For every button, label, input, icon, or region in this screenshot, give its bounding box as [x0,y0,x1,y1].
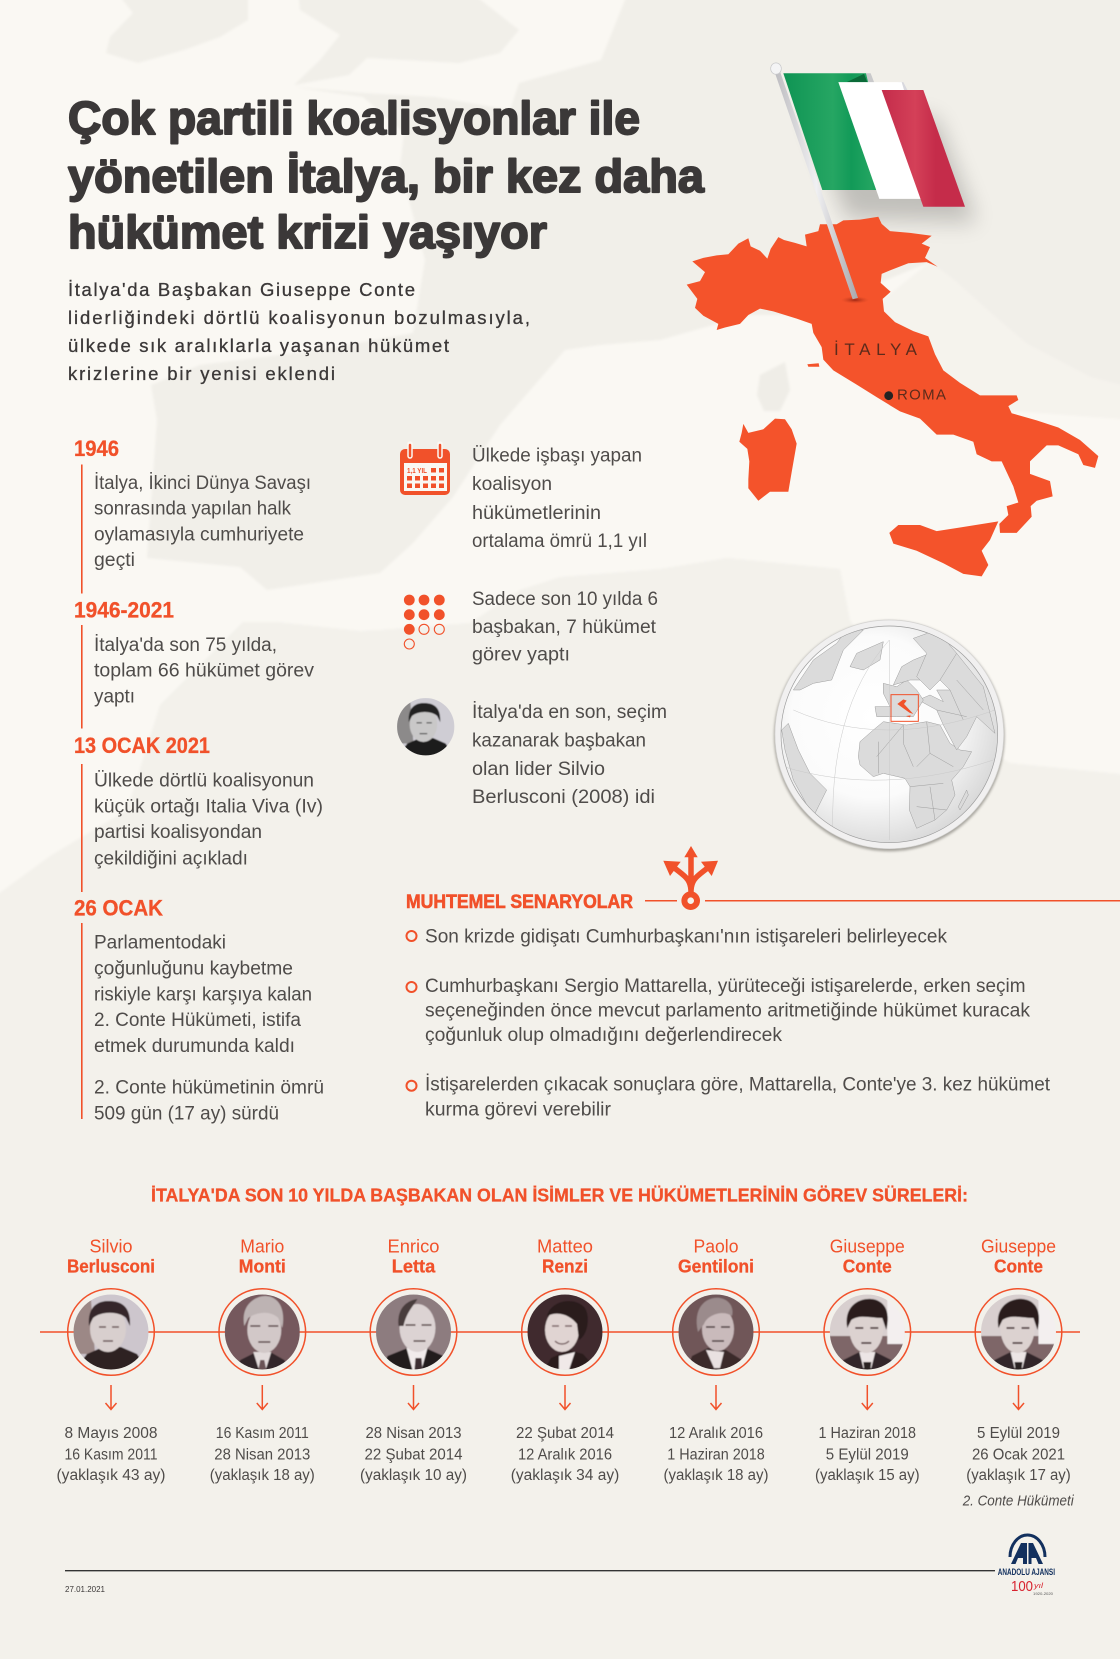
prime minister: Renzi: Matteo [537,1236,593,1256]
Sicily [889,521,998,576]
title: hükümet krizi yaşıyor [68,206,547,258]
fact: prime ministers: başbakan, 7 hükümet [472,617,657,638]
timeline: 13 Ocak 2021: 13 OCAK 2021 [74,733,210,758]
Sardinia [739,419,797,501]
timeline: 13 Ocak 2021 [74,733,323,892]
prime minister: Conte (second government): (yaklaşık 17 ay) [966,1467,1071,1484]
prime minister: Letta [360,1236,467,1484]
timeline: 26 Ocak: riskiyle karşı karşıya kalan [94,984,312,1005]
logo: Anadolu Ajansı: ANADOLU AJANSI [998,1567,1055,1578]
timeline: 1946-2021 [74,598,315,728]
scenario 2: çoğunluk olup olmadığını değerlendirecek [425,1025,783,1046]
fact: Berlusconi [472,702,667,808]
timeline: 1946-2021: 1946-2021 [74,598,174,622]
timeline: 26 Ocak: çoğunluğunu kaybetme [94,959,293,980]
label: ITALYA: İTALYA [834,340,918,359]
fact: prime ministers: görev yaptı [472,645,570,666]
prime minister: Gentiloni [664,1236,768,1484]
scenario 3 [406,1075,1051,1120]
fact: coalition lifetime: ortalama ömrü 1,1 yıl [472,531,647,552]
scenario 2: seçeneğinden önce mevcut parlamento aritmetiğinde hükümet kuracak [425,1001,1031,1022]
prime minister: Gentiloni: 12 Aralık 2016 [669,1425,763,1442]
pole shadow [841,296,869,304]
prime minister: Renzi: 22 Şubat 2014 [516,1425,614,1442]
timeline: 1946-2021: toplam 66 hükümet görev [94,661,315,682]
prime minister: Berlusconi: Silvio [90,1236,132,1256]
prime minister: Berlusconi [56,1236,166,1484]
subtitle [68,279,530,384]
timeline: 26 Ocak: Parlamentodaki [94,932,226,954]
timeline: 26 Ocak: 2. Conte Hükümeti, istifa [94,1010,301,1031]
fact: Berlusconi: kazanarak başbakan [472,731,646,752]
prime minister: Conte (first government): Giuseppe [830,1236,905,1256]
fact: coalition lifetime: Ülkede işbaşı yapan [472,446,642,467]
title: yönetilen İtalya, bir kez daha [68,150,704,202]
scenario 1: Son krizde gidişatı Cumhurbaşkanı'nın istişareleri belirleyecek [425,926,947,947]
title: Çok partili koalisyonlar ile [68,92,640,144]
prime minister: Gentiloni: (yaklaşık 18 ay) [664,1467,768,1484]
prime minister: Monti: Monti [239,1256,286,1276]
prime minister: Conte (second government) [966,1236,1071,1484]
prime minister: Conte (first government): 1 Haziran 2018 [819,1425,916,1442]
note: second Conte government: 2. Conte Hükümeti [962,1494,1074,1510]
prime minister: Monti: Mario [240,1236,284,1256]
scenario rule line [645,900,1120,902]
scenario 2 [406,976,1031,1046]
flag shadow [807,111,977,222]
prime minister: Renzi [511,1236,619,1484]
prime minister: Conte (second government): Giuseppe [981,1236,1056,1256]
timeline: 26 Ocak: etmek durumunda kaldı [94,1036,295,1057]
heading: Muhtemel Senaryolar: MUHTEMEL SENARYOLAR [406,892,633,913]
scenario 3: İstişarelerden çıkacak sonuçlara göre, Mattarella, Conte'ye 3. kez hükümet [425,1075,1051,1096]
prime minister: Gentiloni: Gentiloni [678,1256,754,1276]
timeline: 1946: 1946 [74,436,119,461]
icon: diverging arrows [663,846,718,907]
icon: calendar: 1,1 YIL [407,468,428,475]
timeline: 26 Ocak: 2. Conte hükümetinin ömrü [94,1078,324,1098]
fact: Berlusconi: Berlusconi (2008) idi [472,787,655,808]
timeline: 13 Ocak 2021: Ülkede dörtlü koalisyonun [94,770,314,791]
prime minister: Conte (first government): Conte [843,1256,892,1276]
prime minister: Conte (second government): 5 Eylül 2019 [977,1425,1060,1442]
Italy mainland [687,217,1098,533]
timeline: 26 Ocak: 26 OCAK [74,895,163,920]
prime minister: Letta: Letta [392,1256,436,1276]
prime minister: Gentiloni: 1 Haziran 2018 [667,1446,765,1463]
prime minister: Conte (first government) [815,1236,920,1484]
map of Italy with flag [687,63,1098,576]
flag pole [775,71,858,299]
timeline: 1946: geçti [94,550,135,571]
prime minister: Berlusconi: Berlusconi [67,1256,155,1276]
date: 27.01.2021 [65,1584,105,1594]
timeline: 26 Ocak [74,895,324,1124]
Elba [807,363,819,367]
prime minister: Letta: 22 Şubat 2014 [364,1446,463,1463]
timeline: 1946: sonrasında yapılan halk [94,499,291,520]
timeline: 1946: oylamasıyla cumhuriyete [94,524,304,546]
pole knob [771,63,781,74]
heading: prime ministers: İTALYA'DA SON 10 YILDA BAŞBAKAN OLAN İSİMLER VE HÜKÜMETLERİNİN GÖREV SÜRELERİ: [151,1186,968,1206]
prime minister: Renzi: 12 Aralık 2016 [518,1446,612,1463]
prime minister: Berlusconi: 16 Kasım 2011 [64,1446,158,1463]
flag white stripe [838,82,937,199]
flag red stripe [882,90,965,207]
subtitle: liderliğindeki dörtlü koalisyonun bozulmasıyla, [68,307,530,328]
timeline: 1946-2021: İtalya'da son 75 yılda, [94,635,277,656]
fact: prime ministers [472,589,658,666]
prime minister: Letta: (yaklaşık 10 ay) [360,1467,467,1484]
prime minister: Berlusconi: (yaklaşık 43 ay) [56,1467,166,1484]
prime minister: Letta: Enrico [388,1236,440,1256]
timeline: 26 Ocak: 509 gün (17 ay) sürdü [94,1103,279,1124]
logo: Anadolu Ajansı: yıl [1033,1583,1044,1590]
title [68,92,704,258]
fact: coalition lifetime: koalisyon [472,474,552,495]
scenario 2: Cumhurbaşkanı Sergio Mattarella, yürüteceği istişarelerde, erken seçim [425,976,1026,997]
prime minister: Monti: 28 Nisan 2013 [214,1446,310,1463]
timeline: 1946: İtalya, İkinci Dünya Savaşı [94,473,311,494]
prime minister: Conte (second government): Conte [994,1256,1043,1276]
prime minister: Conte (second government): 26 Ocak 2021 [972,1446,1065,1463]
logo: Anadolu Ajansı [998,1535,1055,1596]
prime minister: Berlusconi: 8 Mayıs 2008 [64,1425,158,1442]
prime minister: Renzi: (yaklaşık 34 ay) [511,1467,619,1484]
fact: Berlusconi: olan lider Silvio [472,759,605,780]
timeline: 13 Ocak 2021: küçük ortağı Italia Viva (Iv) [94,797,323,818]
prime minister: Gentiloni: Paolo [694,1236,738,1256]
prime minister: Renzi: Renzi [542,1256,588,1276]
timeline axis [40,1331,1080,1333]
logo: Anadolu Ajansı: 100 [1011,1578,1033,1595]
fact: coalition lifetime [472,446,647,552]
subtitle: krizlerine bir yenisi eklendi [68,363,335,384]
prime minister: Conte (first government): 5 Eylül 2019 [826,1446,909,1463]
capital marker: Roma: ROMA [897,386,946,404]
prime minister: Monti: 16 Kasım 2011 [216,1425,309,1442]
prime minister: Letta: 28 Nisan 2013 [366,1425,462,1442]
locator globe [774,620,1005,851]
fact: Berlusconi: İtalya'da en son, seçim [472,702,667,723]
timeline: 13 Ocak 2021: partisi koalisyondan [94,822,262,843]
photo: Berlusconi small [397,698,455,757]
fact: prime ministers: Sadece son 10 yılda 6 [472,589,658,610]
subtitle: İtalya'da Başbakan Giuseppe Conte [68,279,415,300]
fact: coalition lifetime: hükümetlerinin [472,503,601,524]
footer rule [65,1570,995,1572]
timeline: 1946-2021: yaptı [94,686,135,707]
logo: Anadolu Ajansı: 1920-2020 [1033,1592,1053,1596]
prime minister: Monti [210,1236,315,1484]
flag green stripe [783,73,893,190]
scenario 3: kurma görevi verebilir [425,1099,612,1120]
prime minister: Conte (first government): (yaklaşık 15 ay) [815,1467,920,1484]
icon: calendar [400,444,450,495]
timeline: 1946 [74,436,311,594]
timeline: 13 Ocak 2021: çekildiğini açıkladı [94,848,248,869]
prime minister: Monti: (yaklaşık 18 ay) [210,1467,315,1484]
icon: dots [404,595,445,649]
subtitle: ülkede sık aralıklarla yaşanan hükümet [68,335,449,356]
